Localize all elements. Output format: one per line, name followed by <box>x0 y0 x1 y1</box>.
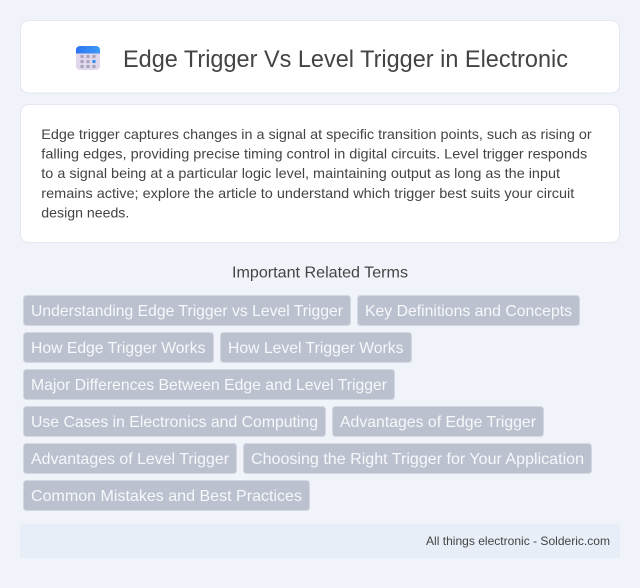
heading: important related terms: Important Related Terms <box>232 265 408 282</box>
tag: common mistakes <box>24 480 310 510</box>
tag: major differences <box>24 370 394 400</box>
tag: how level trigger works <box>220 332 412 362</box>
tag: key definitions: Key Definitions and Concepts <box>365 303 572 320</box>
footer <box>20 524 620 558</box>
icon: calendar <box>76 46 100 70</box>
tag: advantages of level trigger <box>24 444 236 474</box>
description text: Edge trigger captures changes in a signal at specific transition points, such as rising or <box>41 126 592 142</box>
tag: use cases <box>24 406 326 436</box>
tag: common mistakes: Common Mistakes and Best Practices <box>31 488 302 505</box>
footer: All things electronic - Solderic.com <box>426 534 610 548</box>
tag: choosing the right trigger: Choosing the Right Trigger for Your Application <box>251 451 584 468</box>
title: Edge Trigger Vs Level Trigger in Electronic <box>123 46 568 73</box>
panel: description <box>20 104 620 242</box>
description text: design needs. <box>41 204 129 220</box>
tag: understanding: Understanding Edge Trigger vs Level Trigger <box>31 303 344 320</box>
tag: advantages of edge trigger <box>332 406 544 436</box>
tag: use cases: Use Cases in Electronics and Computing <box>31 414 318 431</box>
tag: advantages of level trigger: Advantages of Level Trigger <box>31 451 230 468</box>
panel: related term tags <box>24 296 592 510</box>
panel: title card <box>20 20 620 93</box>
tag: how edge trigger works <box>24 332 214 362</box>
tag: advantages of edge trigger: Advantages of Edge Trigger <box>340 414 537 431</box>
description text: to a signal being at a particular logic level, maintaining output as long as the input <box>41 165 560 181</box>
description text: falling edges, providing precise timing control in digital circuits. Level trigger responds <box>41 146 587 162</box>
tag: major differences: Major Differences Between Edge and Level Trigger <box>31 377 388 394</box>
description text: remains active; explore the article to understand which trigger best suits your circuit <box>41 185 574 201</box>
tag: choosing the right trigger <box>244 444 592 474</box>
tag: key definitions <box>358 296 580 326</box>
description text <box>41 126 592 220</box>
tag: understanding <box>24 296 350 326</box>
tag: how level trigger works: How Level Trigger Works <box>228 340 404 357</box>
tag: how edge trigger works: How Edge Trigger Works <box>31 340 206 357</box>
